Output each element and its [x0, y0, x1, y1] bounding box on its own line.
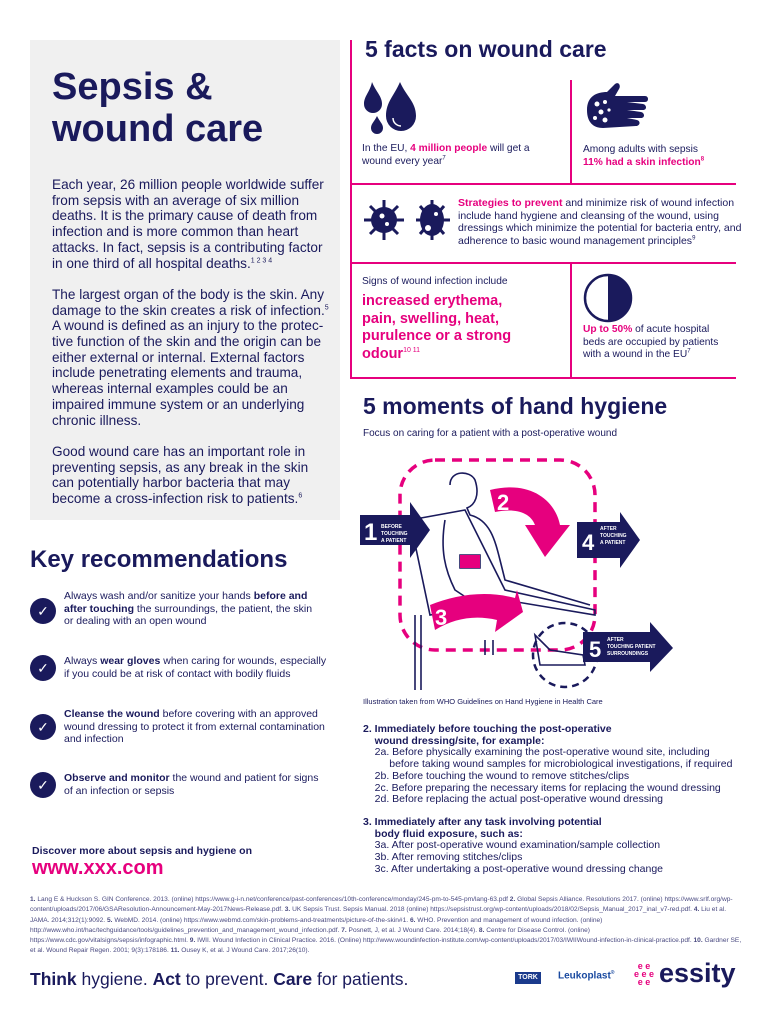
text block: intro: become a cross-infection risk to patients.6 [52, 491, 302, 506]
callout: website [32, 845, 252, 879]
text block: moment 2: 2a. Before physically examining the post-operative wound site, including [375, 746, 710, 758]
title: Sepsis & [52, 66, 213, 108]
text block: intro [52, 177, 329, 506]
fact 4: increased erythema, [362, 293, 502, 309]
text block: intro: The largest organ of the body is the skin. Any [52, 287, 324, 302]
logo: essity: e e [638, 977, 650, 987]
caption: Illustration taken from WHO Guidelines on Hand Hygiene in Health Care [363, 697, 603, 706]
text block: intro: in one third of all hospital deaths.1 2 3 4 [52, 256, 272, 271]
item 2: if you could be at risk of contact with bodily fluids [64, 668, 290, 680]
fact 4 [362, 276, 511, 362]
text block: moment 2: 2d. Before replacing the actual post-operative wound dressing [375, 793, 663, 805]
text block: moment 3 [363, 816, 663, 875]
arrow 4: AFTER [600, 526, 617, 532]
fact 3 [364, 197, 741, 246]
text block: intro: include penetrating elements and trauma, [52, 365, 302, 380]
item 3: Cleanse the wound before covering with an approved [64, 708, 318, 720]
panel: intro [30, 40, 340, 520]
text block: moment 2 [363, 723, 732, 805]
fact 1: In the EU, 4 million people will get a [362, 143, 530, 154]
text block: moment 2: 2c. Before preparing the necessary items for replacing the wound dressing [375, 782, 721, 794]
arrow 2 [490, 487, 570, 557]
fact 3: adherence to basic wound management principles9 [458, 234, 695, 246]
tagline: Think hygiene. Act to prevent. Care for patients. [30, 969, 408, 989]
item 1: Always wash and/or sanitize your hands before and [64, 590, 307, 602]
text block: moment 2: wound dressing/site, for example: [375, 735, 544, 747]
item 2 [30, 655, 326, 681]
arrow 4: 4 [582, 530, 595, 555]
list: recommendations [30, 590, 326, 798]
subtitle: Focus on caring for a patient with a post-operative wound [363, 428, 617, 439]
fact 3: include hand hygiene and cleansing of the wound, using [458, 210, 719, 222]
logo: essity: e e e [634, 969, 654, 979]
heading: key recommendations: Key recommendations [30, 546, 287, 573]
fact 4: purulence or a strong [362, 328, 511, 344]
fact 5 [583, 274, 718, 360]
title [52, 66, 263, 150]
text block: intro: Good wound care has an important role in [52, 444, 305, 459]
text block: intro: impaired immune system or an underlying [52, 397, 304, 412]
arrow 4: A PATIENT [600, 540, 625, 546]
arrow 1: A PATIENT [381, 538, 406, 544]
text block: moment 2: 2b. Before touching the wound to remove stitches/clips [375, 770, 629, 782]
fact 5: beds are occupied by patients [583, 336, 718, 348]
arrow 5 [583, 622, 673, 672]
fact 4: Signs of wound infection include [362, 276, 508, 287]
item 1: ✓ [37, 603, 49, 619]
arrow 2: 2 [497, 490, 509, 515]
fact 3: dressings which minimize the potential for bacteria entry, and [458, 222, 741, 234]
arrow 5: TOUCHING PATIENT [607, 644, 656, 650]
fact 5: Up to 50% of acute hospital [583, 324, 709, 335]
text block: moment 3: body fluid exposure, such as: [375, 828, 523, 840]
arrow 3 [430, 590, 523, 632]
text block: intro: attacks. In fact, sepsis is a contributing factor [52, 240, 322, 255]
text block: intro: either external or internal. External factors [52, 350, 304, 365]
arrow 1: TOUCHING [381, 531, 408, 537]
arrow 5: AFTER [607, 637, 624, 643]
logo: tork: TORK [518, 974, 538, 981]
logo: essity: e e [638, 961, 650, 971]
text block: intro: infection and is more common than heart [52, 224, 298, 239]
item 1: after touching the surroundings, the patient, the skin [64, 602, 312, 614]
text block: intro: preventing sepsis, as any break in the skin [52, 460, 308, 475]
fact 2: 11% had a skin infection8 [583, 156, 704, 168]
item 4: Observe and monitor the wound and patient for signs [64, 772, 318, 784]
item 2: Always wear gloves when caring for wounds, especially [64, 655, 326, 667]
text block: intro: damage to the skin creates a risk of infection.5 [52, 303, 329, 318]
fact 3: Strategies to prevent and minimize risk of wound infection [458, 197, 734, 209]
item 4 [30, 772, 318, 798]
text block: moment 3: 3b. After removing stitches/clips [375, 851, 522, 863]
text block: intro: Each year, 26 million people worldwide suffer [52, 177, 324, 192]
arrow 1: 1 [364, 519, 377, 546]
icon: hand [587, 83, 648, 128]
text block: intro: from sepsis with an average of six million [52, 193, 299, 208]
callout: website: www.xxx.com [32, 857, 164, 879]
text block: intro: chronic illness. [52, 413, 141, 428]
text block: intro: A wound is defined as an injury to the protec- [52, 318, 323, 333]
text block: moment 3: 3c. After undertaking a post-operative wound dressing change [375, 863, 663, 875]
title: wound care [52, 108, 263, 150]
item 3: and infection [64, 733, 124, 745]
text block: intro: deaths. It is the primary cause of death from [52, 208, 317, 223]
item 3: wound dressing to protect it from external contamination [64, 720, 325, 732]
arrow 5: SURROUNDINGS [607, 651, 649, 657]
fact 1: wound every year7 [362, 155, 446, 166]
logo: tork [515, 972, 541, 984]
arrow 3: 3 [435, 605, 447, 630]
fact 5: with a wound in the EU7 [583, 349, 691, 360]
logos [515, 958, 736, 988]
text block: moment 3: 3a. After post-operative wound examination/sample collection [375, 839, 660, 851]
icon: drops [364, 82, 416, 134]
text block: intro: can potentially harbor bacteria that may [52, 475, 290, 490]
chair & patient outline [410, 473, 597, 690]
fact 1 [362, 82, 530, 166]
heading: 5 facts: 5 facts on wound care [365, 36, 607, 62]
arrow 5: 5 [589, 637, 601, 662]
arrow 1: BEFORE [381, 524, 402, 530]
fact 2 [583, 83, 704, 168]
text block: moment 3: 3. Immediately after any task involving potential [363, 816, 602, 828]
fact 4: pain, swelling, heat, [362, 310, 499, 326]
fact 2: Among adults with sepsis [583, 144, 698, 155]
text block: intro: whereas internal examples could be an [52, 381, 288, 396]
item 2: ✓ [37, 660, 49, 676]
arrow 4 [577, 512, 640, 568]
illustration: 5 moments [360, 458, 673, 690]
arrow 4: TOUCHING [600, 533, 627, 539]
text block: intro: tive function of the skin and the origin can be [52, 334, 321, 349]
item 3: ✓ [37, 719, 49, 735]
arrow 1 [360, 502, 430, 558]
item 1: or dealing with an open wound [64, 615, 206, 627]
item 3 [30, 708, 325, 745]
logo: leukoplast: Leukoplast® [558, 970, 614, 981]
item 4: of an infection or sepsis [64, 784, 174, 796]
text block: moment 2: before taking wound samples for microbiological investigations, if required [389, 758, 732, 770]
logo: essity: essity [659, 958, 736, 988]
text block: moment 2: 2. Immediately before touching the post-operative [363, 723, 612, 735]
icon: bacteria [364, 200, 450, 240]
fact 4: odour10 11 [362, 346, 420, 362]
icon: half circle [584, 274, 632, 322]
callout: website: Discover more about sepsis and hygiene on [32, 845, 252, 857]
item 4: ✓ [37, 777, 49, 793]
item 1 [30, 590, 312, 627]
heading: 5 moments: 5 moments of hand hygiene [363, 393, 667, 419]
references: 1. Lang E & Huckson S. GIN Conference. 2013. (online) https://www.g-i-n.net/conference/past-conferences/10th-conference/monday/245-pm-to-545-pm/lang-63.pdf 2. Global Sepsis Alliance. Resolutions 2017. (online) https://www.srlf.org/wp-content/uploads/2017/06/GSAResolution-Announcement-May-2017News-Release.pdf. 3. UK Sepsis Trust. Sepsis Manual. 2018 (online) https://sepsistrust.org/wp-content/uploads/2018/02/Sepsis_Manual_2017_inal_v7-red.pdf. 4. Liu et al. JAMA. 2014;312(1):9092. 5. WebMD. 2014. (online) https://www.webmd.com/skin-problems-and-treatments/picture-of-the-skin#1. 6. WHO. Prevention and management of wound infection. (online) http://www.who.int/hac/techguidance/tools/guidelines_prevention_and_management_wound_infection.pdf. 7. Posnett, J, et al. J Wound Care. 2014;18(4). 8. Centre for Disease Control. (online) https://www.cdc.gov/vitalsigns/sepsis/infographic.html. 9. IWII. Wound Infection in Clinical Practice. 2016. (Online) http://www.woundinfection-institute.com/wp-content/uploads/2017/03/IWIIWound-infection-in-clinical-practice.pdf. 10. Gardner SE, et al. Wound Repair Regen. 2001; 9(3):178186. 11. Ousey K, et al. J Wound Care. 2017;26(10). [30, 896, 741, 954]
